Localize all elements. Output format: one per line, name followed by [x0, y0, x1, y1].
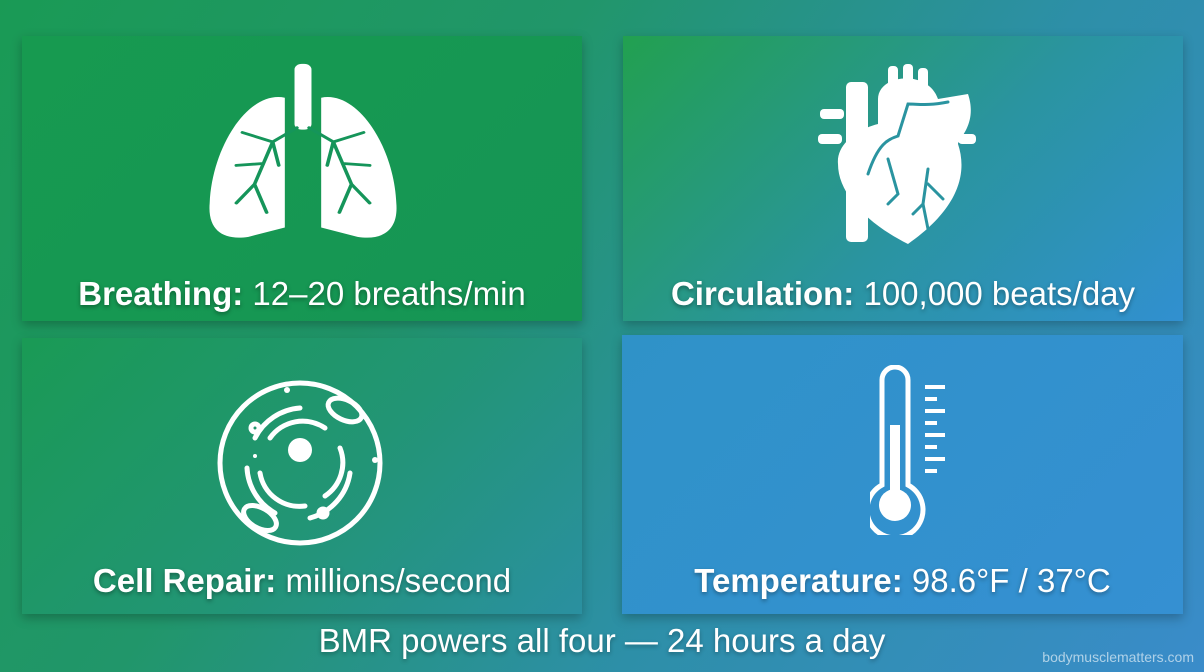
icon: cell [218, 380, 382, 546]
icon: lungs [209, 64, 397, 238]
panel: cell repair [22, 338, 582, 614]
label: cell repair: Cell Repair: millions/second [93, 562, 511, 599]
caption: BMR powers all four — 24 hours a day [319, 622, 885, 659]
panel: temperature [622, 335, 1183, 614]
panel: breathing [22, 36, 582, 321]
watermark: bodymusclematters.com [1042, 649, 1194, 665]
panel: circulation [623, 36, 1183, 321]
icon: thermometer [870, 365, 945, 535]
label: circulation: Circulation: 100,000 beats/day [671, 275, 1135, 312]
label: temperature: Temperature: 98.6°F / 37°C [694, 562, 1111, 599]
label: breathing: Breathing: 12–20 breaths/min [78, 275, 526, 312]
icon: heart [818, 64, 976, 244]
